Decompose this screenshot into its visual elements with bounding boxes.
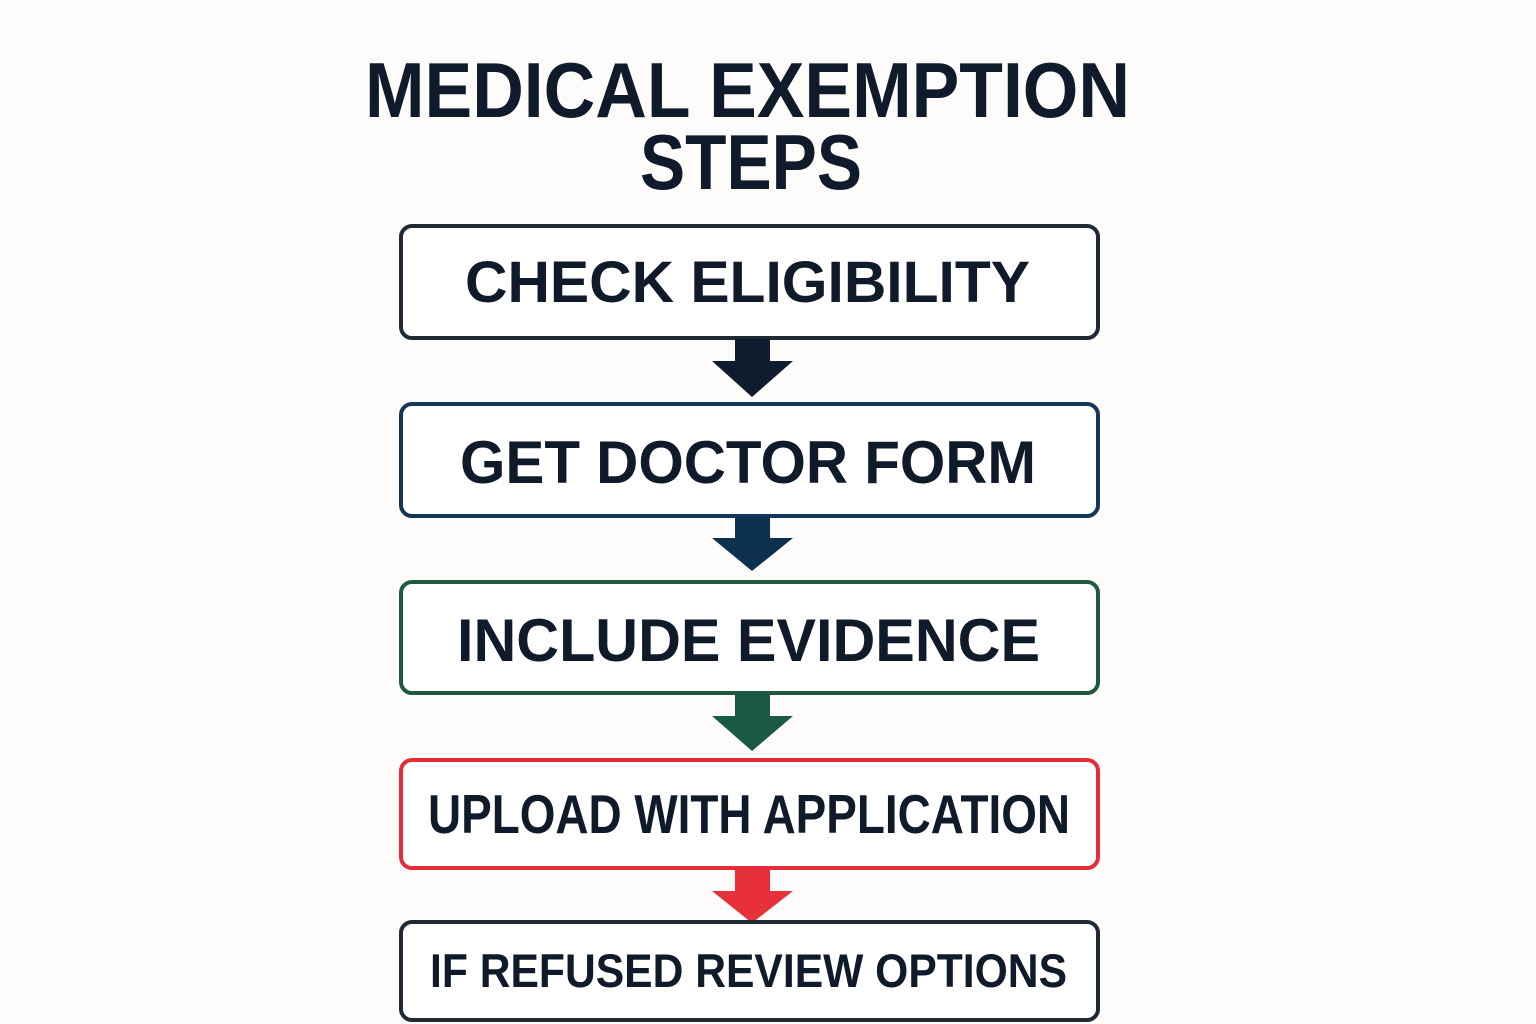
title [365,46,1130,206]
step 2: get doctor form: GET DOCTOR FORM [460,429,1036,496]
step 1: check eligibility: CHECK ELIGIBILITY [465,250,1030,315]
step 4: upload with application: UPLOAD WITH APPLICATION [428,783,1070,845]
arrow 2 [712,517,793,571]
step 5: if refused review options: IF REFUSED REVIEW OPTIONS [430,944,1067,997]
step 4: upload with application [401,760,1098,868]
step 5: if refused review options [401,922,1098,1020]
arrow 3 [712,694,793,751]
step 2: get doctor form [401,404,1098,516]
title: STEPS [640,118,862,206]
arrow 4 [712,869,793,923]
step 3: include evidence [401,582,1098,693]
title: MEDICAL EXEMPTION [365,46,1130,134]
step 3: include evidence: INCLUDE EVIDENCE [457,607,1040,674]
step 1: check eligibility [401,226,1098,338]
arrow 1 [712,339,793,397]
